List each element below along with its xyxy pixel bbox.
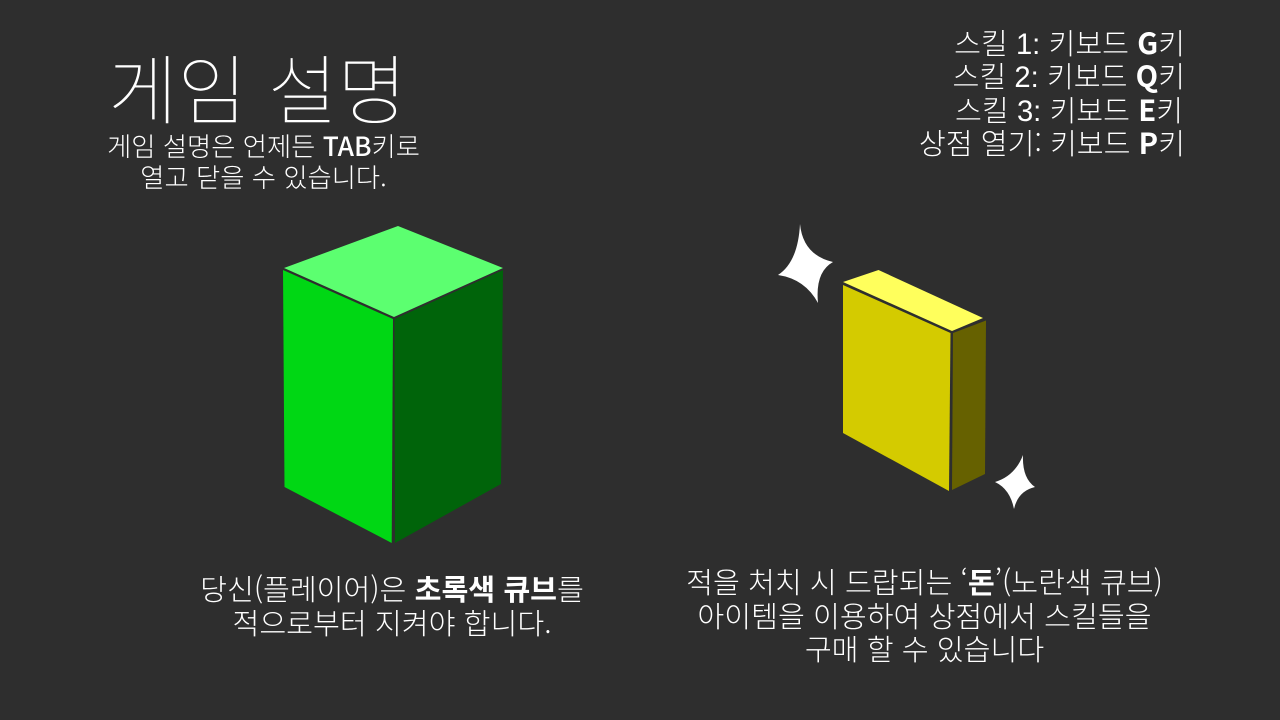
money description: 구매 할 수 있습니다: [805, 627, 1044, 669]
subtitle text: 열고 닫을 수 있습니다.: [140, 156, 387, 195]
key bindings list: 스킬 3: 키보드 E키: [955, 88, 1183, 130]
money description: 적을 처치 시 드랍되는 ‘돈’(노란색 큐브): [686, 560, 1163, 602]
player description: 당신(플레이어)은 초록색 큐브를: [200, 567, 584, 609]
subtitle text: [107, 125, 420, 195]
money description: 아이템을 이용하여 상점에서 스킬들을: [697, 594, 1152, 636]
player description: 적으로부터 지켜야 합니다.: [232, 600, 552, 642]
key bindings list: [919, 21, 1185, 163]
key bindings list: 상점 열기: 키보드 P키: [919, 121, 1185, 163]
money description: [686, 560, 1163, 669]
title: 게임 설명: [108, 30, 407, 140]
key bindings list: 스킬 2: 키보드 Q키: [953, 54, 1185, 96]
player description: [200, 567, 584, 642]
key bindings list: 스킬 1: 키보드 G키: [954, 21, 1185, 63]
subtitle text: 게임 설명은 언제든 TAB키로: [107, 125, 420, 164]
